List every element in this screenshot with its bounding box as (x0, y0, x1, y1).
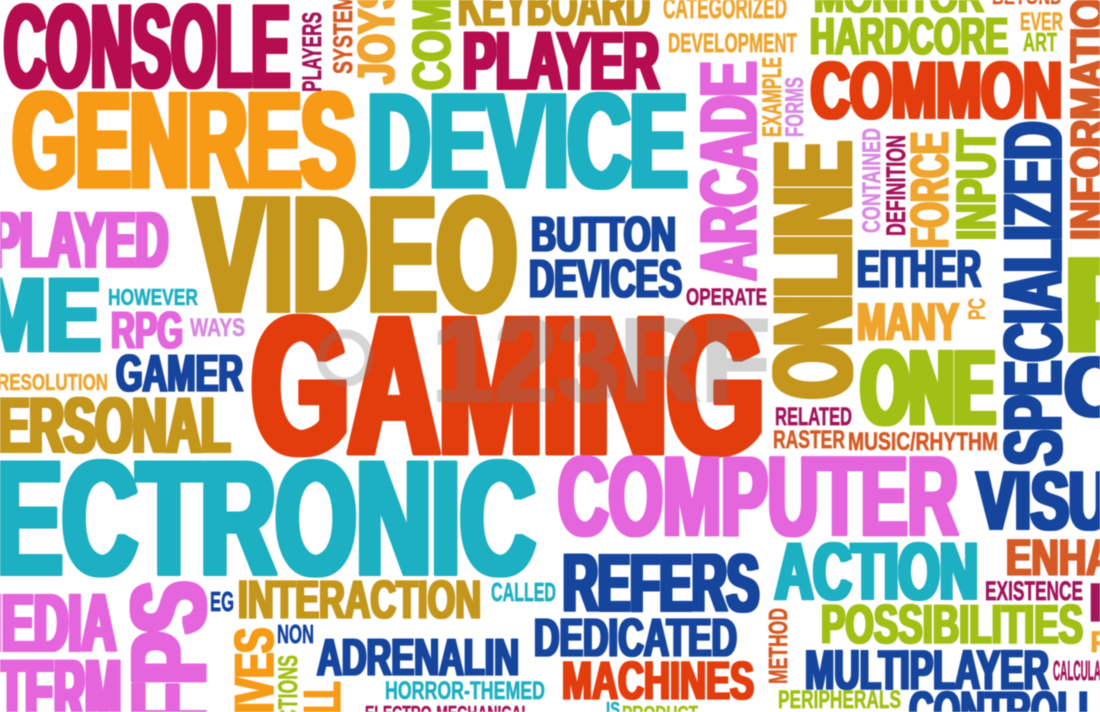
word: RASTER: RASTER (773, 426, 845, 454)
watermark (321, 292, 770, 428)
word: GAMER: GAMER (116, 345, 243, 403)
word: RPG: RPG (111, 302, 183, 360)
word: DEVICE: DEVICE (368, 67, 687, 216)
word: HORROR-THEMED: HORROR-THEMED (385, 677, 545, 705)
word: FORCE: FORCE (900, 132, 960, 248)
word: EXAMPLE: EXAMPLE (757, 57, 787, 137)
word: EVER: EVER (1020, 8, 1063, 36)
word: NON: NON (277, 619, 314, 649)
word: MACHINES: MACHINES (562, 651, 754, 711)
word: VIDEO: VIDEO (195, 163, 517, 346)
word: CALLED: CALLED (491, 577, 556, 607)
word: EG: EG (210, 586, 234, 617)
word: GENRES: GENRES (13, 64, 355, 216)
word: WAYS: WAYS (190, 314, 245, 342)
watermark logo (321, 334, 369, 382)
word: BUTTON: BUTTON (531, 208, 676, 262)
word: MANY: MANY (857, 293, 959, 352)
word: DEVICES: DEVICES (529, 249, 682, 309)
word: ART: ART (1023, 27, 1057, 57)
word: PLAYER: PLAYER (463, 16, 659, 107)
word: OPERATE: OPERATE (686, 284, 767, 311)
word: CONTAINED: CONTAINED (858, 128, 886, 233)
word: FORMS: FORMS (781, 77, 809, 137)
word: INPUT: INPUT (944, 130, 1007, 240)
word: DEDICATED: DEDICATED (534, 608, 737, 668)
word: METHOD: METHOD (763, 608, 793, 684)
word: RESOLUTION: RESOLUTION (0, 369, 108, 395)
word: HOWEVER: HOWEVER (108, 284, 198, 310)
word: DEVELOPMENT: DEVELOPMENT (668, 28, 797, 58)
word: ACTION: ACTION (775, 527, 978, 617)
word: GAMING: GAMING (252, 276, 764, 495)
word: MUSIC/RHYTHM: MUSIC/RHYTHM (848, 428, 998, 456)
word: RELATED: RELATED (775, 403, 852, 431)
word: PC: PC (964, 298, 991, 320)
watermark text: 123RF (432, 292, 770, 428)
word: ONE: ONE (861, 329, 995, 447)
word: EITHER: EITHER (857, 240, 981, 299)
word: ADRENALIN: ADRENALIN (317, 629, 519, 687)
word: INTERACTION: INTERACTION (238, 570, 481, 630)
word: REFERS: REFERS (563, 538, 759, 629)
word: ELECTRONIC: ECTRONIC (0, 428, 535, 609)
word: DEFINITION: DEFINITION (881, 135, 911, 236)
